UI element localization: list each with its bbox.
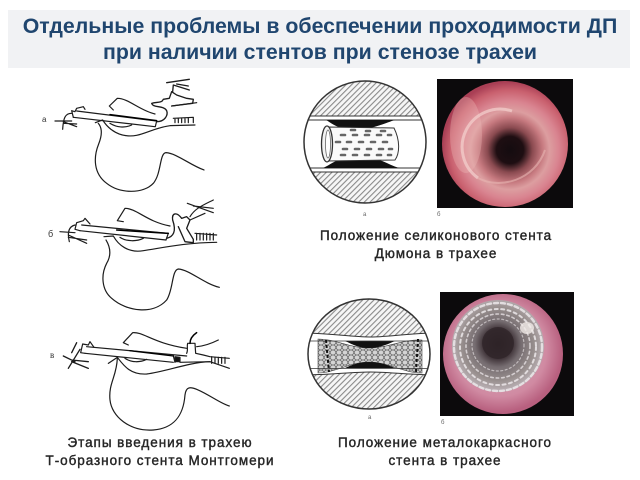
diagram: metal-frame stent cross-section (307, 298, 431, 419)
title: Отдельные проблемы в обеспечении проходимости ДП (23, 14, 617, 38)
caption: Montgomery T-stent insertion steps: Т-образного стента Монтгомери (46, 452, 274, 468)
title: при наличии стентов при стенозе трахеи (103, 40, 537, 64)
diagram a: stent insertion, step one (55, 79, 204, 191)
photo: Dumon stent endoscopy (437, 79, 573, 218)
caption: Montgomery T-stent insertion steps: Этапы введения в трахею (67, 435, 253, 450)
caption: silicone Dumon stent position: Положение селиконового стента (320, 228, 552, 243)
diagram: silicone Dumon stent cross-section (300, 78, 430, 218)
stent tube (328, 127, 399, 161)
diagram c: stent insertion, step three (63, 333, 229, 430)
caption: metal-frame stent position: Положение металокаркасного (338, 435, 552, 450)
photo: metal-frame stent endoscopy (440, 292, 574, 426)
label: a: а (42, 115, 47, 124)
caption: metal-frame stent position: стента в трахее (388, 452, 502, 468)
caption: silicone Dumon stent position: Дюмона в трахее (375, 246, 497, 260)
diagram: metal-frame stent cross-section: а (368, 415, 372, 421)
caption: Montgomery T-stent insertion steps (46, 435, 274, 468)
diagram b: stent insertion, step two (60, 200, 219, 310)
label: b: б (48, 229, 53, 239)
caption: silicone Dumon stent position (320, 228, 552, 262)
label: c: в (50, 350, 54, 360)
diagram: silicone Dumon stent cross-section: а (363, 212, 367, 218)
title (23, 14, 617, 64)
title band (8, 10, 630, 68)
caption: metal-frame stent position (338, 435, 552, 468)
photo: metal-frame stent endoscopy: б (441, 420, 445, 426)
photo: Dumon stent endoscopy: б (437, 212, 441, 218)
